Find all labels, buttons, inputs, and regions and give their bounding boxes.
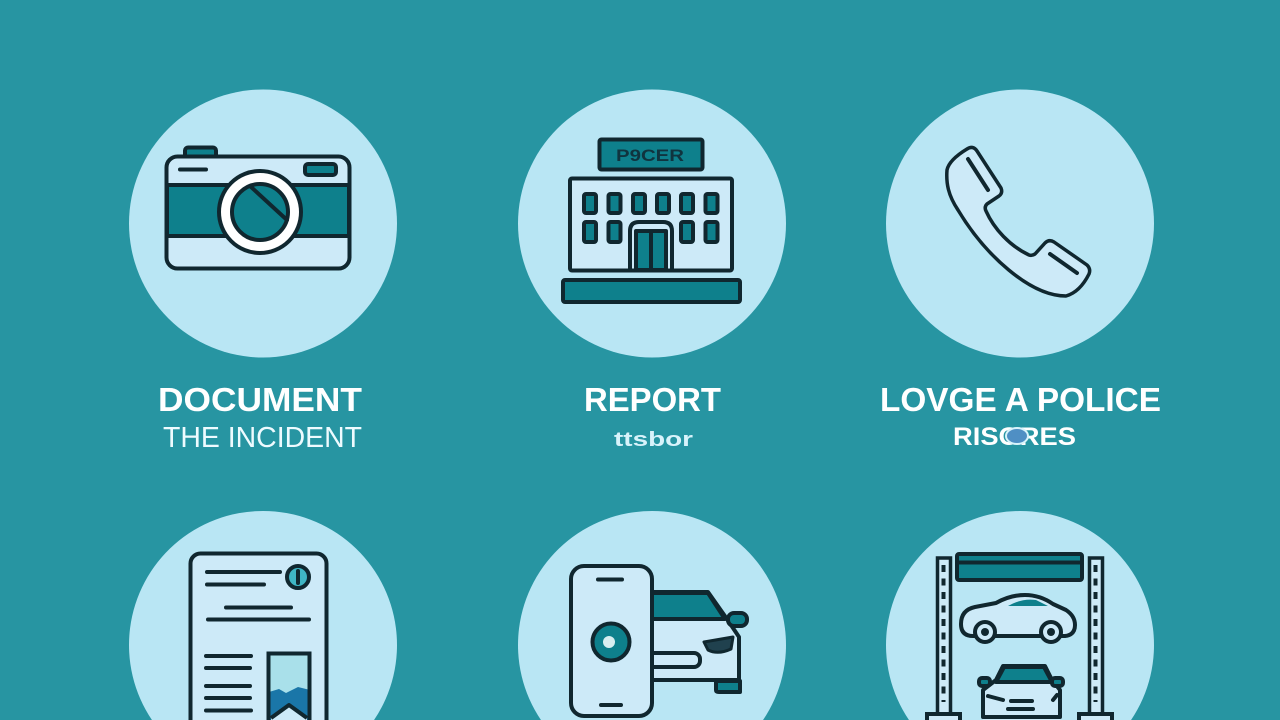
icon: police building: P9CER — [616, 146, 684, 165]
icon: camera — [129, 90, 397, 358]
subheading: garbled text: ttsbor — [614, 429, 693, 451]
heading: lodge a police: LOVGE A POLICE — [880, 381, 1161, 418]
icon: document with bookmark — [129, 511, 397, 720]
icon: vehicle lift with cars — [886, 511, 1154, 720]
panel: lodge a police report — [880, 90, 1161, 451]
panel: vehicle lift — [886, 511, 1154, 720]
heading: document: DOCUMENT — [158, 381, 362, 418]
panel: phone and car — [518, 511, 786, 720]
subheading: garbled text with blue highlight: RISORES — [953, 423, 1076, 451]
icon: police building — [518, 90, 786, 358]
subheading: the incident: THE INCIDENT — [163, 422, 362, 454]
panel: insurance document — [129, 511, 397, 720]
heading: report: REPORT — [584, 381, 721, 418]
panel: report — [518, 90, 786, 451]
icon: phone and car — [518, 511, 786, 720]
icon: telephone handset — [886, 90, 1154, 358]
panel: document the incident — [129, 90, 397, 454]
